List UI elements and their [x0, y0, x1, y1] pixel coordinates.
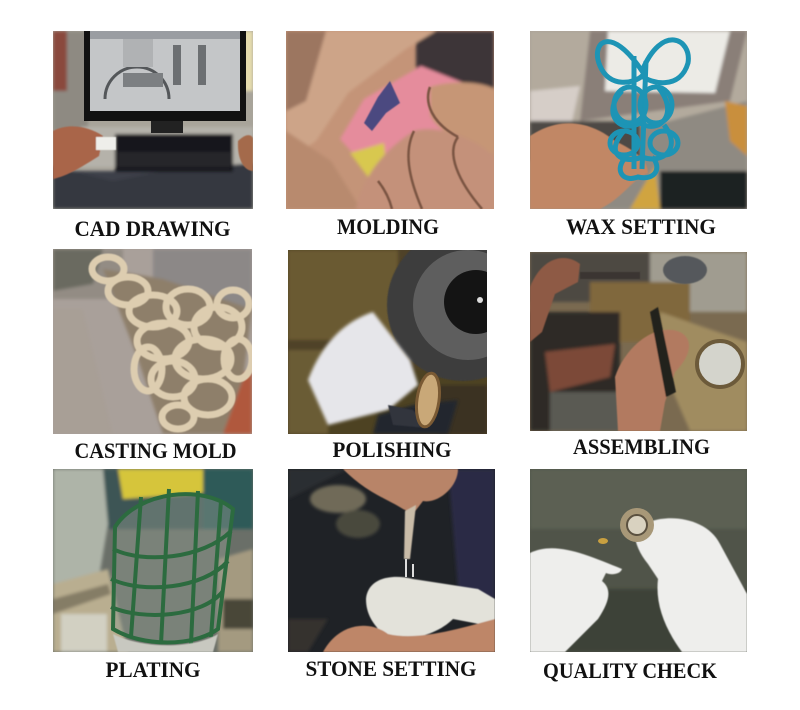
panel: CAD drawing photo [53, 31, 253, 209]
panel: plating photo [53, 469, 253, 652]
icon: wax figure in mold [364, 81, 400, 131]
heading: CAD DRAWING: CAD DRAWING [74, 216, 230, 241]
panel: quality check photo [530, 469, 747, 652]
finger creases [378, 87, 482, 209]
heading: PLATING: PLATING [106, 657, 200, 682]
icon: monitor [84, 31, 246, 133]
heading: ASSEMBLING: ASSEMBLING [573, 434, 710, 459]
panel: stone setting photo [288, 469, 495, 652]
hands with tool [530, 258, 689, 431]
panel: wax setting photo [530, 31, 747, 209]
panel: polishing photo [288, 250, 487, 434]
heading: MOLDING: MOLDING [337, 214, 439, 239]
icon: cluster of cast rings [92, 257, 252, 429]
heading: WAX SETTING: WAX SETTING [566, 214, 716, 239]
gloved hand [308, 312, 418, 425]
panel: molding photo [286, 31, 494, 209]
heading: QUALITY CHECK: QUALITY CHECK [543, 658, 717, 683]
heading: POLISHING: POLISHING [332, 437, 452, 462]
heading: CASTING MOLD: CASTING MOLD [74, 438, 236, 463]
icon: polishing wheel [387, 229, 539, 381]
icon: ring [413, 372, 443, 428]
heading: STONE SETTING: STONE SETTING [306, 656, 476, 681]
hands and tweezers [323, 469, 495, 652]
white gloved hands [530, 518, 747, 652]
icon: dial gauge [697, 341, 743, 387]
hand holding tree [530, 123, 648, 209]
hands holding card [53, 126, 253, 179]
icon: jewel pendant [598, 508, 654, 544]
icon: green plating rack [111, 489, 233, 644]
panel: casting mold photo [53, 249, 252, 434]
panel: assembling photo [530, 252, 747, 431]
icon: blue wax tree [597, 40, 688, 178]
